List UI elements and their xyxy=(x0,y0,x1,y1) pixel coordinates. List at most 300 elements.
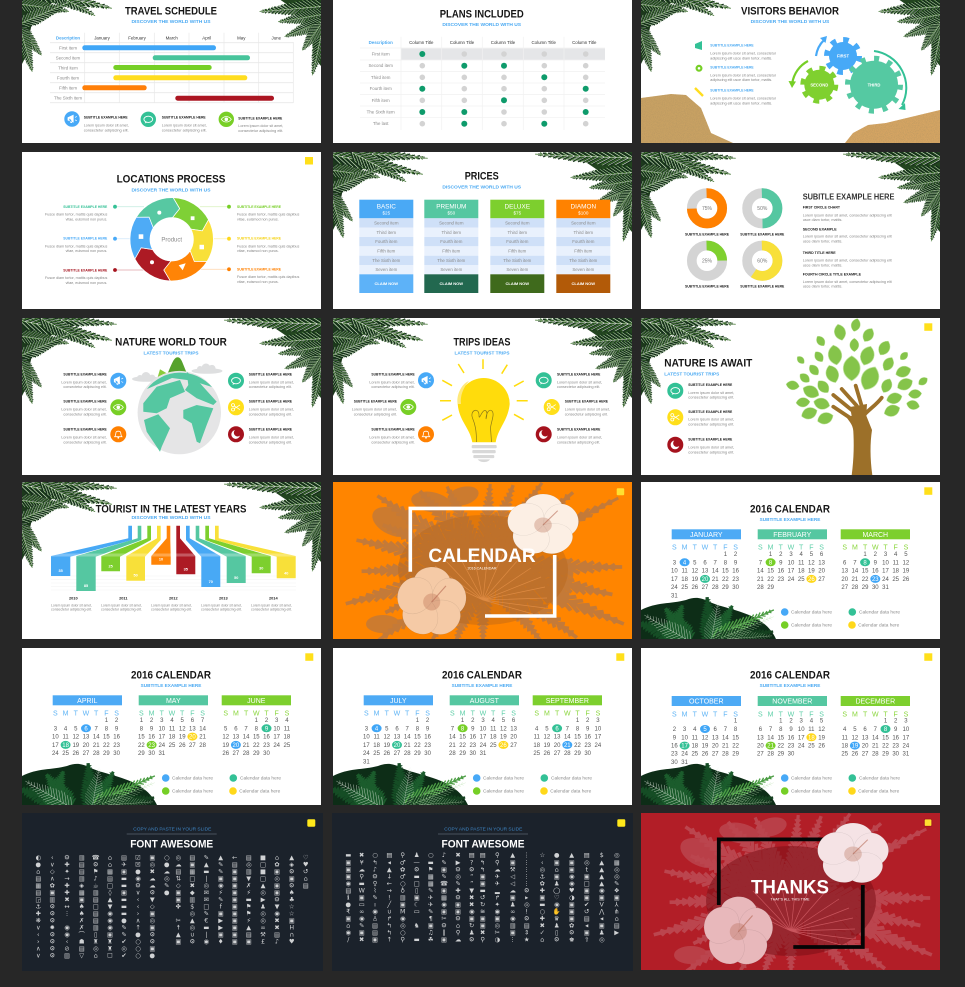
icon grid: ⌂◇✦▤⚑▦▣●✖☁▤▦▬✎▣▥■▣⚙↺ xyxy=(36,868,308,875)
legend xyxy=(162,774,281,795)
month: april: F xyxy=(104,711,109,718)
panel: calendar january to march xyxy=(641,482,940,639)
donut: 75 percent: 75% xyxy=(702,206,713,212)
month: september: 2 xyxy=(586,718,590,724)
month: november: 18 xyxy=(808,735,815,741)
month: march: 5 xyxy=(904,552,908,558)
legend: Calendar data here xyxy=(240,776,281,781)
gear diagram: SECOND xyxy=(810,82,828,87)
month: january: M xyxy=(682,545,688,552)
yellow marker xyxy=(617,819,625,827)
month: december: 3 xyxy=(904,719,908,725)
icon grid: ₹∞◉∪M▭✎▣▣◉≋◉∞!○✋▣↺⋀⋔ xyxy=(346,908,619,916)
month: december: 27 xyxy=(862,752,869,758)
month: april: S xyxy=(53,711,58,718)
month: july: M xyxy=(374,711,380,718)
month: march: 27 xyxy=(841,585,849,591)
month: august: 15 xyxy=(459,735,467,741)
panel: nature is await xyxy=(641,318,940,475)
feature: megaphone: consectetur adipiscing elit. xyxy=(84,127,129,132)
month: november: 26 xyxy=(818,744,826,750)
month: april: 8 xyxy=(105,726,109,732)
month: january: 26 xyxy=(691,585,699,591)
legend: Calendar data here xyxy=(859,776,900,781)
month: november: 4 xyxy=(810,719,814,725)
month: august: T xyxy=(471,711,476,718)
month: november: T xyxy=(799,711,804,718)
year notes: 2012 xyxy=(169,596,178,601)
month: february: 23 xyxy=(777,577,785,583)
left features xyxy=(61,372,126,444)
month: april: 19 xyxy=(72,743,80,749)
subtitle: LATEST TOURIST TRIPS xyxy=(454,350,510,355)
icon grid: ●▭ı╱▣☾✈◉▣✖↻✦♟◎▬◉▣✔V⅄ xyxy=(346,901,619,909)
month: july: 30 xyxy=(424,751,432,757)
right features: consectetur adipiscing elit. xyxy=(565,411,608,416)
icon grid: ›⚙‹☗♜♜✔○⚙ ▣⚙◉♦▣▣£♪♥ xyxy=(37,938,295,945)
right features: Lorem ipsum dolor sit amet, xyxy=(565,407,610,412)
month: august: 6 xyxy=(512,718,516,724)
left features: Lorem ipsum dolor sit amet, xyxy=(369,379,415,384)
legend: Calendar data here xyxy=(172,789,213,794)
price card: basic xyxy=(359,200,413,293)
caption: COPY AND PASTE IN YOUR SLIDE xyxy=(133,826,211,831)
comparison table: Column Title xyxy=(572,40,597,45)
month: october: 20 xyxy=(712,744,719,750)
caption: COPY AND PASTE IN YOUR SLIDE xyxy=(444,826,522,831)
gantt chart: May xyxy=(237,36,246,40)
month: july: 21 xyxy=(404,743,411,749)
month: december: 25 xyxy=(841,752,849,758)
month: april: 27 xyxy=(83,751,90,757)
month: january xyxy=(671,529,741,599)
black frame xyxy=(719,839,863,947)
month: june: 8 xyxy=(255,726,259,732)
month: may: 15 xyxy=(138,735,145,741)
labels left: vitae, euismod non purus. xyxy=(66,280,107,285)
left features: consectetur adipiscing elit. xyxy=(371,384,415,389)
month: october: 17 xyxy=(681,744,689,750)
month: december: 17 xyxy=(903,735,910,741)
features: SUBTITLE EXAMPLE HERE xyxy=(688,437,733,442)
month: may: 1 xyxy=(140,718,144,724)
month: october: 21 xyxy=(722,744,729,750)
month: december: 1 xyxy=(884,719,888,725)
chart notes: Lorem ipsum dolor sit amet, consectetur adipiscing elit xyxy=(803,234,893,239)
month: march: 18 xyxy=(892,569,900,575)
month: january: 20 xyxy=(702,577,709,583)
month: september: 6 xyxy=(555,726,559,732)
year notes: 2013 xyxy=(219,596,228,601)
month: february xyxy=(757,529,827,591)
month: june: 24 xyxy=(273,743,281,749)
title: THANKS xyxy=(751,876,829,898)
donut: 75 percent: SUBTITLE EXAMPLE HERE xyxy=(685,231,729,236)
month: september: 5 xyxy=(545,726,549,732)
price card: premium: $50 xyxy=(447,210,456,215)
month: november: W xyxy=(788,711,795,718)
month: march: F xyxy=(894,545,898,552)
month: august: 29 xyxy=(459,751,467,757)
month: september: 25 xyxy=(533,751,541,757)
palm fronds xyxy=(13,0,330,77)
palm fronds xyxy=(324,310,641,409)
feature: megaphone: Lorem ipsum dolor sit amet, xyxy=(84,122,129,127)
month: july: 7 xyxy=(406,726,410,732)
month: september: S xyxy=(596,711,601,718)
month: march: 10 xyxy=(882,560,889,566)
month: july: 2 xyxy=(426,718,430,724)
palm fronds xyxy=(632,0,949,77)
month: november: S xyxy=(819,711,824,718)
palm fronds xyxy=(13,310,330,409)
month: may: T xyxy=(160,711,165,718)
month: september: 8 xyxy=(576,726,580,732)
panel: plans included xyxy=(333,0,632,143)
price card: basic: Fourth item xyxy=(375,239,398,244)
month: june: S xyxy=(223,711,228,718)
month: june: 12 xyxy=(222,735,230,741)
month: october: W xyxy=(702,711,709,718)
month: february: 28 xyxy=(757,585,764,591)
subtitle: DISCOVER THE WORLD WITH US xyxy=(442,185,521,190)
ribbon bar chart: 50 xyxy=(234,576,238,580)
month: october: 23 xyxy=(671,752,678,758)
month: may: 28 xyxy=(199,743,207,749)
panel: font awesome icons two xyxy=(332,813,633,971)
labels left: vitae, euismod non purus. xyxy=(66,248,107,253)
yellow marker xyxy=(305,653,313,661)
month: october: 10 xyxy=(681,735,689,741)
month: june: 5 xyxy=(224,726,228,732)
month: july: 10 xyxy=(363,735,370,741)
month: december: 14 xyxy=(872,735,879,741)
left features: consectetur adipiscing elit. xyxy=(63,439,107,444)
price card: diamon: $100 xyxy=(578,210,589,215)
month: march: 16 xyxy=(872,569,879,575)
hibiscus bottom left xyxy=(393,567,471,642)
month: january: 30 xyxy=(732,585,740,591)
month: june: 9 xyxy=(265,726,269,732)
month: october: 2 xyxy=(673,727,677,733)
month: may: 26 xyxy=(179,743,186,749)
month: september: 17 xyxy=(595,735,602,741)
month: december: 4 xyxy=(843,727,847,733)
month: january: 29 xyxy=(722,585,729,591)
yellow marker xyxy=(305,157,313,164)
price card: basic: Second item xyxy=(374,220,399,226)
price card: premium: Seven item xyxy=(440,267,463,272)
right features: consectetur adipiscing elit. xyxy=(249,439,292,444)
month: january: T xyxy=(713,545,718,552)
donut: 75 percent xyxy=(685,193,729,236)
month: december: 13 xyxy=(862,735,869,741)
gear diagram: FIRST xyxy=(837,54,849,59)
month: february: 10 xyxy=(788,560,795,566)
month: december: 2 xyxy=(894,719,898,725)
month: february: M xyxy=(768,545,774,552)
month: march: T xyxy=(883,545,888,552)
ribbon bar chart: 25 xyxy=(108,564,113,568)
title: PRICES xyxy=(465,171,499,183)
year notes: consectetur adipiscing elit. xyxy=(101,606,142,611)
chart notes: usce diam tortor, mattis. xyxy=(803,284,842,289)
month: july: S xyxy=(425,711,430,718)
month: april: 9 xyxy=(115,726,119,732)
month: november: 9 xyxy=(789,727,793,733)
list: behaviours: SUBTITLE EXAMPLE HERE xyxy=(710,43,754,48)
chart notes: SECOND EXAMPLE xyxy=(803,226,837,231)
month: april: 24 xyxy=(52,751,59,757)
month: april: 12 xyxy=(72,735,80,741)
month: january: 13 xyxy=(702,569,709,575)
labels left: SUBTITLE EXAMPLE HERE xyxy=(63,236,108,241)
month: april: 4 xyxy=(64,726,68,732)
month: march: 4 xyxy=(894,552,898,558)
gantt chart: The Sixth item xyxy=(54,96,82,100)
month: november: 11 xyxy=(808,727,815,733)
month: november: F xyxy=(809,711,814,718)
month: may: MAY xyxy=(166,698,181,705)
hibiscus top right xyxy=(503,494,584,560)
month: october xyxy=(671,696,741,766)
month: february: 7 xyxy=(759,560,763,566)
gantt chart: June xyxy=(272,36,282,40)
right features: consectetur adipiscing elit. xyxy=(249,384,292,389)
month: june: JUNE xyxy=(247,698,266,705)
month: april: 10 xyxy=(52,735,59,741)
month: july: 4 xyxy=(375,726,379,732)
panel: nature world tour xyxy=(22,318,321,475)
month: december: 23 xyxy=(892,744,900,750)
month: august: 5 xyxy=(502,718,506,724)
month: may: 30 xyxy=(148,751,156,757)
month: april: T xyxy=(74,711,79,718)
right features: consectetur adipiscing elit. xyxy=(557,384,600,389)
foliage xyxy=(632,596,777,652)
month: april: 13 xyxy=(83,735,90,741)
month: april: 1 xyxy=(105,718,109,724)
month: november: M xyxy=(768,711,774,718)
price card: basic: Seven item xyxy=(375,267,398,272)
price card: deluxe xyxy=(490,200,544,293)
month: april: 22 xyxy=(103,743,110,749)
month: october: 27 xyxy=(712,752,719,758)
left features: Lorem ipsum dolor sit amet, xyxy=(61,407,107,412)
ribbon bar chart: 30 xyxy=(259,566,263,570)
month: may: F xyxy=(190,711,195,718)
icon grid: ●∨✚▤⚙⌂✈☒◎●☁▣▲✎▤◎□✿◈♥ xyxy=(36,861,309,868)
month: november: 6 xyxy=(759,727,763,733)
icon grid: ▣◉♙↱◉ ¶✂⚙▣▣▣◉⚙✚♛▣▤◂⌂ xyxy=(345,916,619,923)
subtitle: SUBTITLE EXAMPLE HERE xyxy=(141,683,201,688)
panel: trips ideas xyxy=(333,318,632,475)
feature: eye: consectetur adipiscing elit. xyxy=(238,128,283,133)
feature: megaphone xyxy=(64,111,129,132)
month: july: 1 xyxy=(416,718,420,724)
panel: font awesome icons one xyxy=(22,813,323,971)
price card: deluxe: CLAIM NOW xyxy=(506,281,529,286)
month: may: 23 xyxy=(148,743,156,749)
price card: premium xyxy=(424,200,478,293)
month: january: 31 xyxy=(671,593,678,599)
month: september: 18 xyxy=(533,743,541,749)
month: july: 23 xyxy=(424,743,432,749)
month: may: 7 xyxy=(201,718,205,724)
month: september: 21 xyxy=(564,743,571,749)
subtitle: SUBTITLE EXAMPLE HERE xyxy=(760,683,820,688)
subtitle: DISCOVER THE WORLD WITH US xyxy=(751,19,829,24)
comparison table xyxy=(360,37,605,130)
features: consectetur adipiscing elit. xyxy=(688,395,734,400)
year notes: 2011 xyxy=(119,596,128,601)
month: may: 29 xyxy=(138,751,145,757)
labels left: SUBTITLE EXAMPLE HERE xyxy=(63,267,108,272)
panel: prices xyxy=(333,152,632,309)
features: consectetur adipiscing elit. xyxy=(688,422,734,427)
month: november: 27 xyxy=(757,752,764,758)
price card: basic: CLAIM NOW xyxy=(375,281,398,286)
month: september: S xyxy=(534,711,539,718)
month: december: 21 xyxy=(872,744,879,750)
right features: consectetur adipiscing elit. xyxy=(557,439,600,444)
month: march: 3 xyxy=(884,552,888,558)
month: october: S xyxy=(672,711,677,718)
month: august: 8 xyxy=(461,726,465,732)
year notes: Lorem ipsum dolor sit amet, xyxy=(101,602,142,607)
month: november: 14 xyxy=(767,735,775,741)
month: january: S xyxy=(672,545,677,552)
panel: visitors behavior xyxy=(641,0,940,143)
year notes: 2014 xyxy=(269,596,278,601)
month: august: 7 xyxy=(451,726,455,732)
title: 2016 CALENDAR xyxy=(442,669,522,681)
month: february: 1 xyxy=(769,552,773,558)
month: april: 14 xyxy=(93,735,100,741)
month: january: 24 xyxy=(671,585,678,591)
month: september: 15 xyxy=(574,735,581,741)
yellow marker xyxy=(617,488,624,495)
icon grid: ▣☁♪▲✿⚙⚑▣⚙⚙↰☁⚒⋮◎⌂▣t▲◎ xyxy=(345,866,620,873)
month: march: 29 xyxy=(862,585,869,591)
month: december: 18 xyxy=(841,744,849,750)
month: november: 21 xyxy=(767,744,775,750)
labels right: vitae, euismod non purus. xyxy=(237,217,279,222)
month: may: 5 xyxy=(181,718,185,724)
left features: SUBTITLE EXAMPLE HERE xyxy=(371,372,415,377)
comparison table: Fourth item xyxy=(370,86,392,91)
right features: Lorem ipsum dolor sit amet, xyxy=(557,434,602,439)
palm fronds xyxy=(632,144,949,243)
month: june: 26 xyxy=(222,751,230,757)
month: september: 23 xyxy=(584,743,592,749)
chart notes: Lorem ipsum dolor sit amet, consectetur adipiscing elit xyxy=(803,279,893,284)
month: june: T xyxy=(244,711,249,718)
month: january: F xyxy=(723,545,728,552)
month: may: 16 xyxy=(148,735,156,741)
month: november: 7 xyxy=(769,727,773,733)
month: march: S xyxy=(904,545,909,552)
month: march: S xyxy=(842,545,847,552)
month: november: 3 xyxy=(800,719,804,725)
left features: consectetur adipiscing elit. xyxy=(63,411,107,416)
month: october: 31 xyxy=(681,760,689,766)
month: april: S xyxy=(114,711,119,718)
white frame xyxy=(410,508,555,616)
gantt chart: Second item xyxy=(56,56,81,60)
month: march xyxy=(841,529,910,591)
subtitle: DISCOVER THE WORLD WITH US xyxy=(132,19,210,24)
month: january: 8 xyxy=(724,560,728,566)
price card: premium: PREMIUM xyxy=(436,204,466,210)
title: NATURE WORLD TOUR xyxy=(115,336,227,348)
month: may: 20 xyxy=(189,735,196,741)
price card: diamon: Second item xyxy=(571,220,596,226)
caption rule xyxy=(438,833,528,835)
month: february: S xyxy=(819,545,824,552)
month: january: 14 xyxy=(712,569,719,575)
month: august: 23 xyxy=(469,743,477,749)
month: november: 23 xyxy=(788,744,795,750)
month: september: 30 xyxy=(584,751,592,757)
comparison table: Fifth item xyxy=(372,98,390,103)
price card: deluxe: Second item xyxy=(505,220,530,226)
price card: premium: CLAIM NOW xyxy=(440,281,463,286)
subtitle: 2016 CALENDAR xyxy=(468,566,497,570)
month: april: 28 xyxy=(93,751,100,757)
month: january: 3 xyxy=(673,560,677,566)
icon grid: ▣¥↰◂♂—▬✎▶?↰⚲▣⋮‹▣▣◎▲▦ xyxy=(345,859,620,866)
month: february: 22 xyxy=(767,577,775,583)
legend: Calendar data here xyxy=(483,789,524,794)
month: september: 28 xyxy=(564,751,571,757)
month: september xyxy=(533,695,602,757)
price card: diamon xyxy=(556,200,610,293)
left features: Lorem ipsum dolor sit amet, xyxy=(352,407,397,412)
comparison table: Second item xyxy=(368,63,393,68)
month: march: 28 xyxy=(852,585,859,591)
month: october: 29 xyxy=(732,752,740,758)
donut: 60 percent: SUBTITLE EXAMPLE HERE xyxy=(740,284,785,289)
month: april: 6 xyxy=(84,726,88,732)
icon grid xyxy=(35,854,309,959)
month: july: 15 xyxy=(414,735,421,741)
tropical foliage xyxy=(343,477,628,649)
left features: Lorem ipsum dolor sit amet, xyxy=(61,434,107,439)
month: may: 21 xyxy=(199,735,207,741)
month: december: DECEMBER xyxy=(855,699,895,706)
features: SUBTITLE EXAMPLE HERE xyxy=(688,382,733,387)
feature: speech bubble: consectetur adipiscing elit. xyxy=(162,127,207,132)
month: march: 19 xyxy=(903,569,910,575)
month: january: 7 xyxy=(714,560,718,566)
month: july: 29 xyxy=(414,751,421,757)
hibiscus bottom left xyxy=(699,897,778,972)
month: november: 5 xyxy=(820,719,824,725)
left features: SUBTITLE EXAMPLE HERE xyxy=(354,398,397,403)
month: march: 26 xyxy=(903,577,910,583)
year notes xyxy=(51,596,292,611)
month: january: 28 xyxy=(712,585,719,591)
month: july: 27 xyxy=(394,751,401,757)
month: september: 13 xyxy=(554,735,561,741)
month: january: 23 xyxy=(732,577,740,583)
month: april: 16 xyxy=(113,735,121,741)
month: july: T xyxy=(385,711,390,718)
month: march: 20 xyxy=(841,577,849,583)
feature: eye xyxy=(219,112,283,133)
month: july: 18 xyxy=(373,743,381,749)
